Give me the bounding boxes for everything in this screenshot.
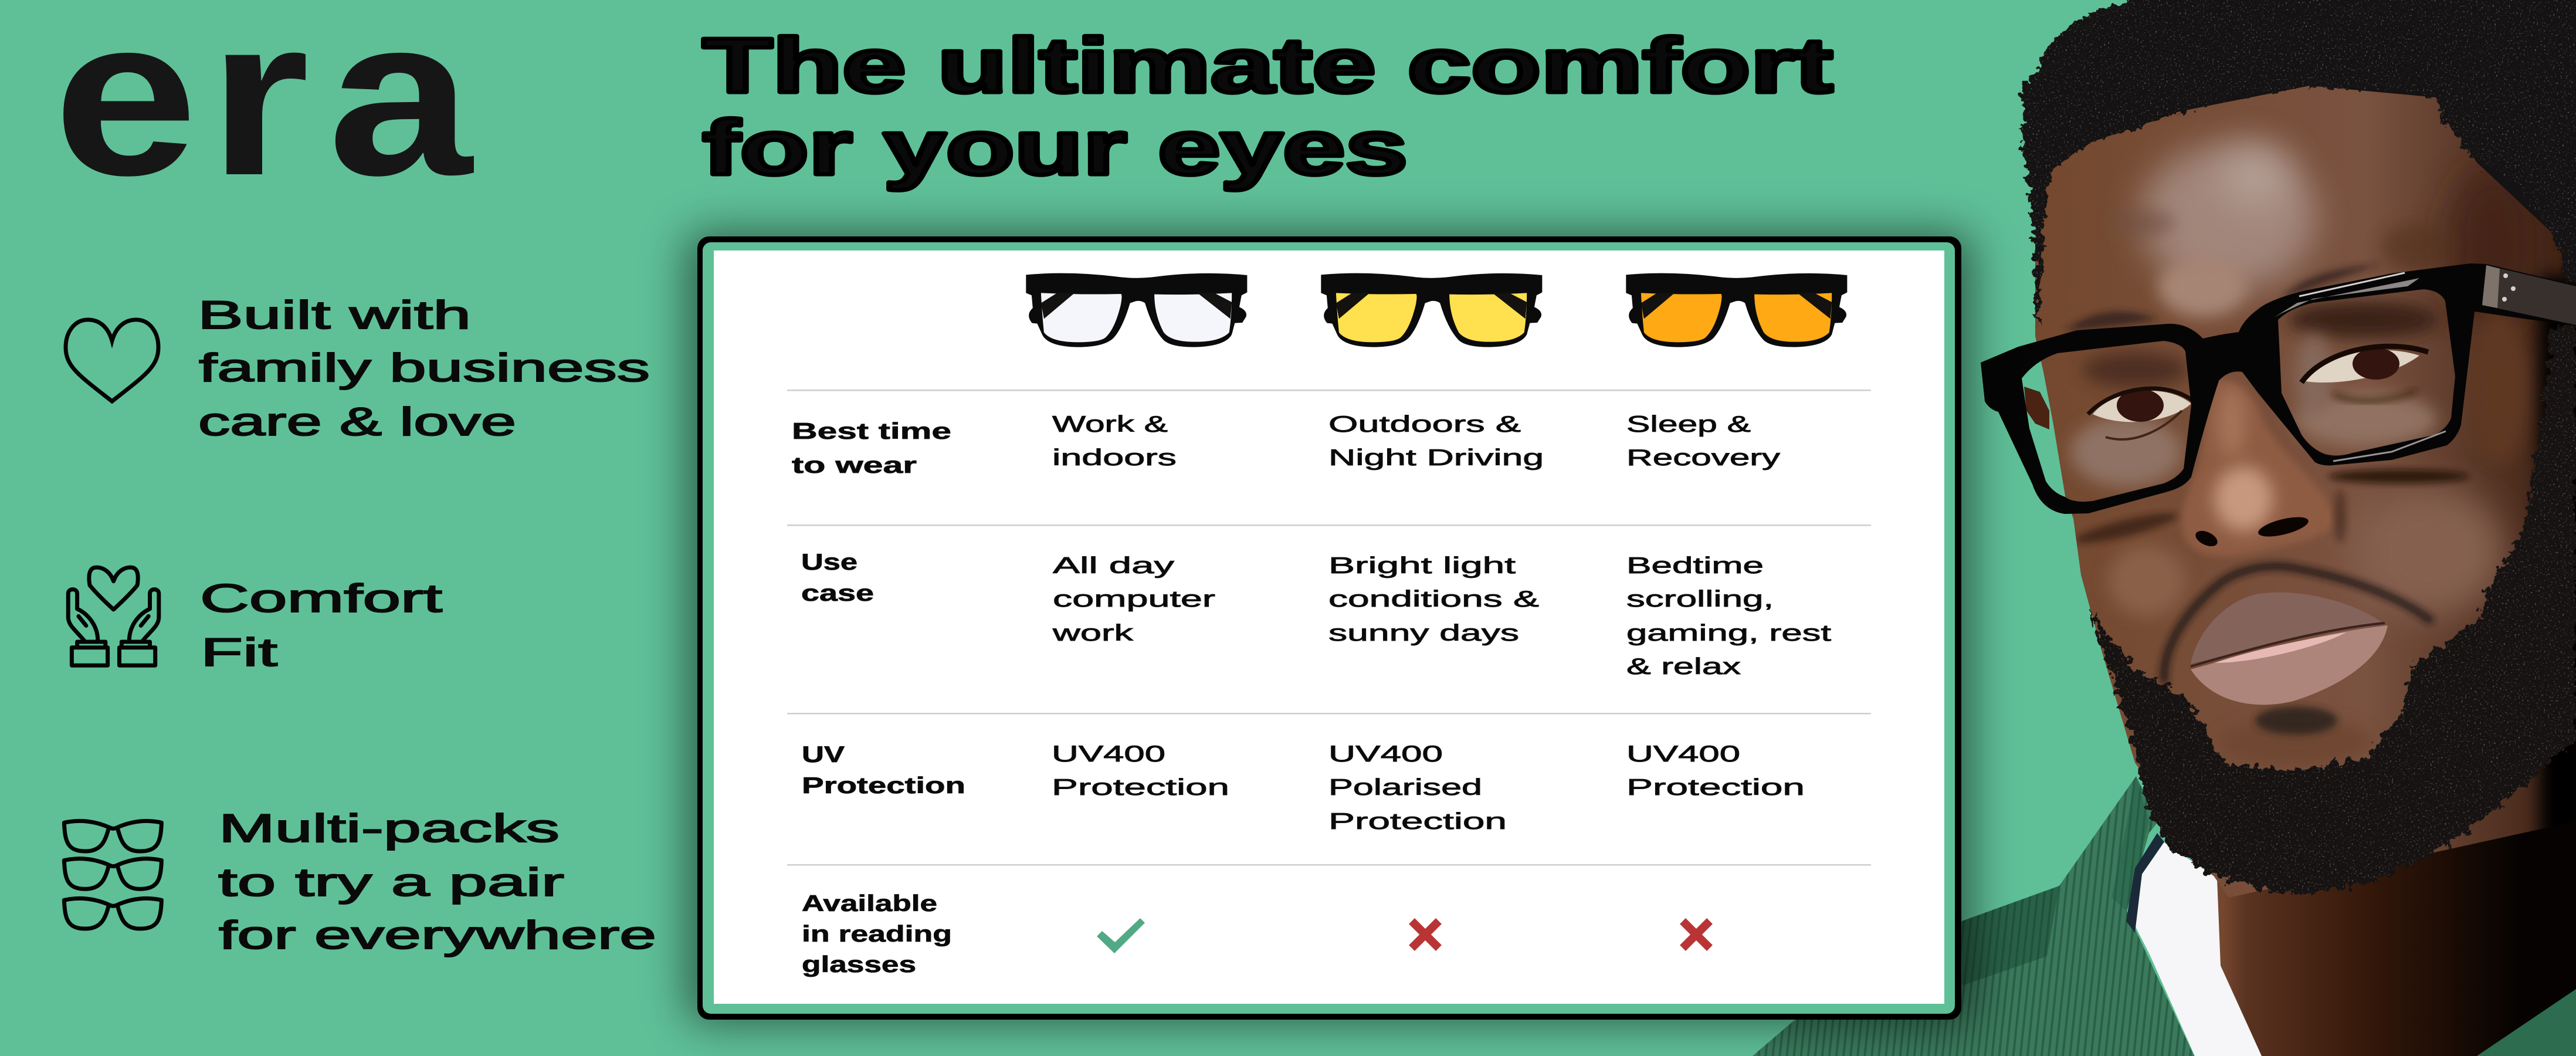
row: best time to wear: Outdoors &: [1328, 412, 1521, 437]
title: The ultimate comfort: [703, 22, 1833, 109]
row: available in reading glasses: [802, 891, 1710, 977]
row: UV protection: Polarised: [1328, 775, 1482, 800]
hair: [2020, 0, 2576, 329]
feature text: to try a pair: [218, 860, 564, 905]
product: orange glasses: [1626, 273, 1847, 347]
chin skin: [2220, 719, 2372, 766]
row: UV protection: UV400: [1626, 742, 1740, 767]
row: use case: case: [801, 581, 874, 606]
icon: heart: [66, 320, 158, 401]
neck: [2211, 704, 2576, 1056]
glasses temple behind lens: [2024, 387, 2049, 429]
icon: hands holding heart: [68, 567, 159, 665]
jacket: [1753, 776, 2576, 1056]
row: available in reading glasses: glasses: [802, 952, 916, 977]
icon: red cross: [1683, 921, 1710, 948]
face: [2018, 70, 2576, 903]
right eye: [2302, 346, 2428, 401]
row: UV protection: [802, 742, 1805, 834]
row: best time to wear: [792, 412, 1781, 478]
title: [703, 22, 1833, 191]
title: for your eyes: [703, 104, 1408, 191]
row: UV protection: Protection: [1328, 809, 1507, 834]
row: use case: conditions &: [1328, 587, 1539, 612]
row: use case: computer: [1053, 587, 1215, 612]
eyeglasses worn: [1981, 263, 2576, 514]
forehead highlight: [2141, 144, 2317, 290]
product: clear glasses: [1026, 273, 1247, 347]
right lens skin: [2296, 393, 2437, 446]
row: UV protection: Protection: [802, 773, 965, 798]
beard: [2089, 317, 2576, 895]
feature text: Fit: [201, 630, 277, 675]
row: best time to wear: Night Driving: [1328, 445, 1544, 471]
row: UV protection: Protection: [1052, 775, 1229, 800]
feature text: Multi-packs: [219, 806, 560, 851]
row: UV protection: Protection: [1626, 775, 1805, 800]
icon: stacked glasses: [64, 821, 161, 929]
row: use case: Bedtime: [1626, 553, 1764, 578]
feature text: Comfort: [200, 576, 442, 621]
right cheek: [2352, 487, 2504, 616]
shadows under glasses: [2328, 469, 2469, 483]
row: available in reading glasses: Available: [802, 891, 937, 916]
feature: family business: [66, 293, 650, 444]
product: yellow glasses: [1321, 273, 1542, 347]
left eye: [2088, 388, 2194, 439]
row: best time to wear: Best time: [792, 419, 951, 444]
row: best time to wear: indoors: [1052, 445, 1177, 471]
feature: comfort fit: [68, 567, 442, 675]
row: best time to wear: to wear: [792, 453, 917, 478]
temple shade: [2446, 164, 2540, 329]
lips: [2191, 593, 2388, 705]
feature text: for everywhere: [219, 913, 656, 957]
nostrils: [2193, 513, 2310, 549]
row: use case: Use: [801, 550, 857, 575]
feature text: family business: [199, 346, 650, 390]
row: use case: & relax: [1626, 654, 1741, 679]
panel shadow: [686, 232, 1974, 1024]
white shirt: [2126, 833, 2262, 1056]
temple arm: [2482, 265, 2576, 325]
feature text: [218, 806, 656, 957]
feature text: [198, 293, 650, 444]
feature: multi-packs: [64, 806, 656, 957]
head backing: [2035, 0, 2576, 763]
row: best time to wear: Work &: [1052, 412, 1168, 437]
nose: [2182, 380, 2334, 556]
feature text: care & love: [198, 400, 516, 444]
row: UV protection: UV400: [1328, 742, 1443, 767]
row: use case: sunny days: [1328, 621, 1519, 646]
panel frame: [697, 236, 1961, 1020]
row: available in reading glasses: in reading: [802, 922, 952, 947]
row: use case: gaming, rest: [1626, 621, 1831, 646]
row: use case: scrolling,: [1626, 587, 1774, 612]
row: use case: All day: [1053, 553, 1175, 578]
moustache: [2164, 566, 2432, 683]
row: use case: [801, 550, 1831, 679]
row: use case: Bright light: [1328, 553, 1516, 578]
photo: man wearing glasses: [1753, 0, 2576, 1056]
right dark side: [2540, 276, 2576, 862]
icon: green check: [1097, 918, 1145, 953]
feature text: Built with: [198, 293, 471, 337]
row: UV protection: UV: [802, 742, 845, 767]
frame highlight: [2274, 278, 2419, 317]
row: use case: work: [1052, 621, 1134, 646]
eyebrows: [2065, 264, 2381, 331]
goatee under lip: [2255, 706, 2337, 735]
icon: red cross: [1412, 921, 1439, 948]
row: UV protection: UV400: [1052, 742, 1165, 767]
row: best time to wear: Recovery: [1626, 445, 1781, 471]
row: best time to wear: Sleep &: [1626, 412, 1751, 437]
panel: comparison table: [697, 236, 1961, 1020]
feature text: [200, 576, 442, 675]
left lens skin: [2070, 417, 2182, 487]
left cheek: [2109, 546, 2185, 616]
